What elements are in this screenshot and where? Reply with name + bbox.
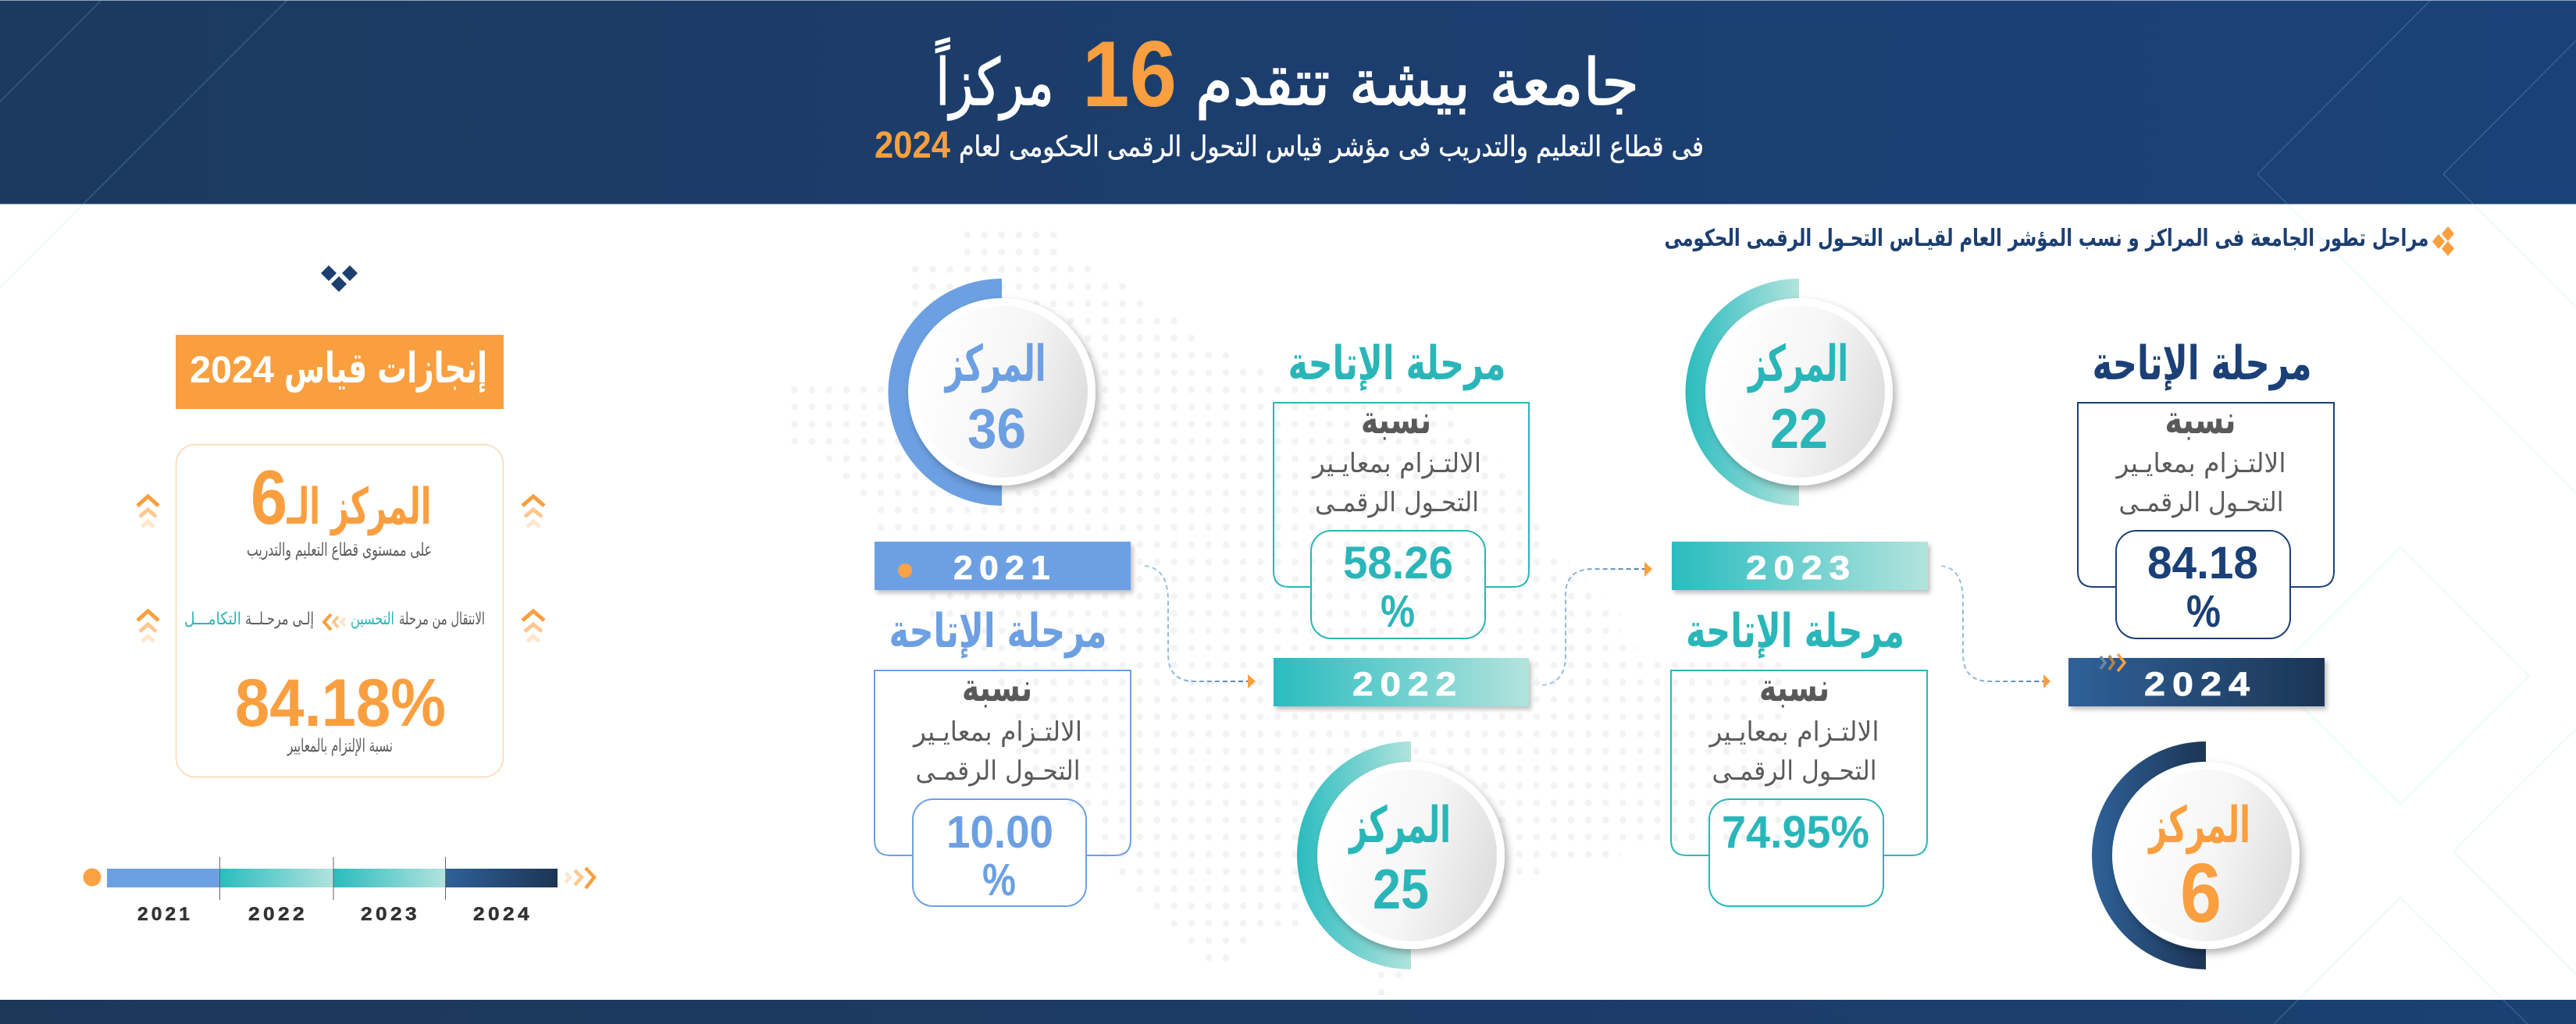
rank circle 2021 [889,279,1096,506]
rank circle 2021: 36 [967,398,1026,460]
compliance box 2024: الالتـزام بمعايـير [2115,448,2286,479]
panel: 2024 [2068,336,2334,969]
year bar 2021 [875,542,1131,590]
icon: up chevrons right bottom [522,611,544,642]
stage heading 2023: مرحلة الإتاحة [1686,604,1904,659]
start dot [83,868,102,887]
banner: achievements 2024: إنجازات قياس [284,343,487,393]
header band [0,0,2576,204]
stage transition line: إلـى مرحـلــة [245,610,314,629]
compliance box 2021: % [982,855,1016,905]
timeline years: 2024 [473,904,533,925]
compliance box 2023: نسبة [1759,665,1830,710]
banner: achievements 2024: 2024 [190,350,274,391]
title: 16 [1082,22,1177,126]
compliance percentage: 84.18% [235,666,446,741]
timeline years [137,904,533,925]
year bar 2021: 2021 [953,549,1056,587]
connector arrow 2021 to 2022 [1145,566,1256,688]
icon: up chevrons left top [137,496,159,527]
compliance box 2022: الالتـزام بمعايـير [1311,448,1481,479]
icon: navy diamonds [321,265,358,292]
compliance box 2024 [2078,397,2334,638]
rank circle 2024: 6 [2180,845,2221,940]
stage heading 2021: مرحلة الإتاحة [889,604,1107,659]
stage heading 2024: مرحلة الإتاحة [2093,336,2311,391]
timeline years: 2022 [248,904,308,925]
rank circle 2023: 22 [1770,398,1828,460]
panel: achievements card [176,445,503,777]
subtitle: 2024 [875,125,950,166]
rank circle 2024 [2092,741,2300,969]
panel: 2023 [1671,279,1928,906]
compliance box 2022: نسبة [1361,397,1431,443]
compliance box 2023 [1671,665,1927,906]
icon: bar chevrons [2100,654,2125,671]
compliance box 2021: الالتـزام بمعايـير [912,716,1082,748]
subtitle [875,125,1704,166]
compliance box 2024: نسبة [2164,397,2236,443]
title: جامعة بيشة تتقدم [1195,46,1639,120]
timeline legend [83,857,594,925]
compliance box 2023: 74.95% [1722,807,1869,858]
stage transition line: التحسين [351,610,394,629]
icon: left chevrons [324,614,345,630]
compliance box 2021: التحـول الرقمـى [915,756,1081,787]
compliance box 2022 [1274,397,1529,638]
panel: 2021 [875,279,1131,906]
rank circle 2023: المركز [1747,336,1848,393]
rank circle 2022: المركز [1348,797,1451,855]
timeline bar segments [107,869,558,887]
year bar 2024 [2068,654,2325,706]
footer band [0,1000,2576,1024]
stage heading 2022: مرحلة الإتاحة [1288,336,1505,391]
icon: orange diamonds [2432,226,2454,256]
compliance box 2022: % [1381,586,1415,637]
title: مركزاً [935,37,1054,120]
compliance box 2022: التحـول الرقمـى [1315,487,1479,518]
stage transition line [184,610,485,630]
icon: up chevrons right top [522,496,544,527]
rank circle 2021: المركز [944,336,1046,393]
connector arrow 2022 to 2023 [1542,562,1652,685]
year bar 2022: 2022 [1352,666,1463,703]
rank circle 2023 [1685,279,1893,506]
stage transition line: الانتقال من مرحلة [399,610,485,629]
rank circle 2022 [1297,741,1505,969]
compliance box 2024: % [2186,586,2221,637]
compliance box 2021 [875,665,1131,906]
compliance box 2023: الالتـزام بمعايـير [1708,716,1879,748]
compliance box 2024: التحـول الرقمـى [2119,487,2283,518]
rank heading [251,454,431,540]
panel: 2022 [1274,336,1529,969]
compliance box 2021: 10.00 [946,807,1053,858]
compliance box 2023: التحـول الرقمـى [1712,756,1877,787]
compliance box 2021: نسبة [962,665,1032,710]
compliance caption: نسبة الإلتزام بالمعايير [287,736,393,756]
icon: up chevrons left bottom [137,611,159,642]
timeline years: 2021 [137,904,193,925]
rank heading: المركز الـ [287,478,431,536]
year bar 2022 [1274,658,1529,706]
compliance box 2024: 84.18 [2147,538,2258,588]
rank circle 2022: 25 [1373,859,1429,921]
stage transition line: التكامـــل [184,610,241,629]
rank caption: على ممستوى قطاع التعليم والتدريب [247,540,432,560]
background dotted map [785,226,1790,999]
year bar 2024: 2024 [2144,666,2257,703]
timeline years: 2023 [361,904,420,925]
year bar 2023 [1672,542,1928,590]
icon: right chevrons [565,868,594,888]
rank circle 2024: المركز [2147,797,2250,855]
connector arrow 2023 to 2024 [1941,566,2050,688]
banner: achievements 2024 [176,335,504,409]
compliance box 2022: 58.26 [1343,538,1453,588]
year bar 2023: 2023 [1746,549,1857,587]
rank heading: 6 [251,454,287,540]
subtitle: فى قطاع التعليم والتدريب فى مؤشر قياس التحول الرقمى الحكومى لعام [959,131,1704,163]
title [935,22,1639,126]
